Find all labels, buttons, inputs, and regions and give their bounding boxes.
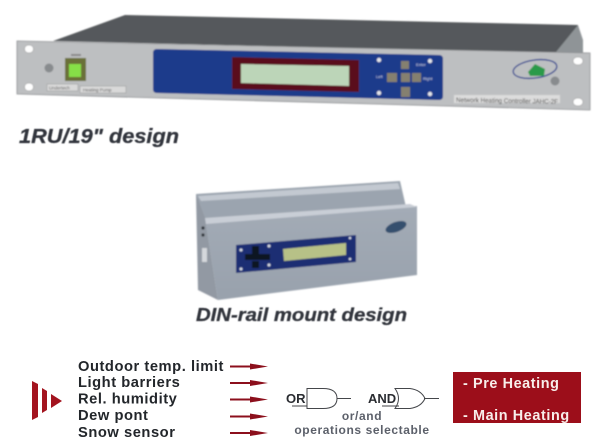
keypad labels bbox=[376, 62, 433, 81]
output: main heating: - Main Heating bbox=[463, 408, 570, 424]
logo bbox=[512, 57, 558, 81]
rack side bracket bbox=[556, 25, 583, 54]
OR label: OR bbox=[286, 391, 306, 406]
DIN rear rail bbox=[196, 181, 406, 222]
rack top cover bbox=[53, 15, 578, 53]
screw knob right bbox=[550, 76, 560, 86]
DIN keypad bbox=[245, 246, 270, 268]
left label plates: Undertech bbox=[49, 86, 70, 90]
caption: or/and operations selectable bbox=[294, 409, 430, 437]
panel corner screws bbox=[377, 58, 432, 96]
DIN side ports bbox=[201, 226, 205, 237]
AND label: AND bbox=[368, 391, 396, 406]
DIN front highlight bbox=[205, 204, 417, 224]
LCD display bbox=[232, 57, 359, 92]
caption: or/and operations selectable: operations selectable bbox=[294, 423, 430, 437]
keypad buttons bbox=[387, 61, 421, 97]
left label plates bbox=[47, 84, 126, 93]
screw knob left bbox=[44, 64, 54, 72]
left label plates: Heating Pump bbox=[83, 88, 112, 92]
DIN front face bbox=[205, 206, 417, 300]
power button bbox=[65, 54, 86, 81]
heading: 1RU/19 design: 1RU/19" design bbox=[19, 126, 179, 148]
input: outdoor temp limit: Outdoor temp. limit bbox=[78, 359, 224, 375]
keypad labels: Left bbox=[376, 74, 384, 79]
input: light barriers: Light barriers bbox=[78, 375, 180, 391]
OR gate bbox=[286, 388, 351, 408]
model label plate: Network Heating Controller JAHC-2F bbox=[456, 97, 558, 106]
input: snow sensor: Snow sensor bbox=[78, 425, 175, 441]
input list bbox=[78, 359, 224, 441]
icon: red triangle bars bbox=[32, 381, 62, 420]
blue control panel bbox=[153, 49, 443, 100]
DIN-rail device bbox=[196, 181, 417, 300]
DIN rear highlight bbox=[198, 183, 400, 201]
DIN LCD bbox=[283, 243, 346, 261]
AND gate bbox=[368, 388, 439, 408]
rack unit: 1RU/19 inch device bbox=[17, 15, 590, 110]
output: pre heating: - Pre Heating bbox=[463, 376, 560, 392]
input: dew point: Dew pont bbox=[78, 408, 148, 424]
input arrows bbox=[230, 364, 268, 436]
keypad labels: Enter bbox=[416, 62, 426, 67]
mounting holes bbox=[24, 45, 583, 106]
keypad labels: Right bbox=[423, 76, 433, 81]
output panel: heating stages bbox=[453, 372, 581, 424]
heading: DIN-rail mount design: DIN-rail mount design bbox=[196, 305, 407, 325]
DIN blue panel bbox=[236, 235, 356, 273]
DIN logo bbox=[384, 219, 408, 235]
DIN panel screws bbox=[240, 237, 351, 270]
rack front panel bbox=[17, 41, 590, 110]
DIN side connector bbox=[202, 248, 207, 262]
caption: or/and operations selectable: or/and bbox=[342, 409, 382, 423]
input: rel humidity: Rel. humidity bbox=[78, 392, 178, 408]
DIN side bbox=[196, 194, 218, 300]
